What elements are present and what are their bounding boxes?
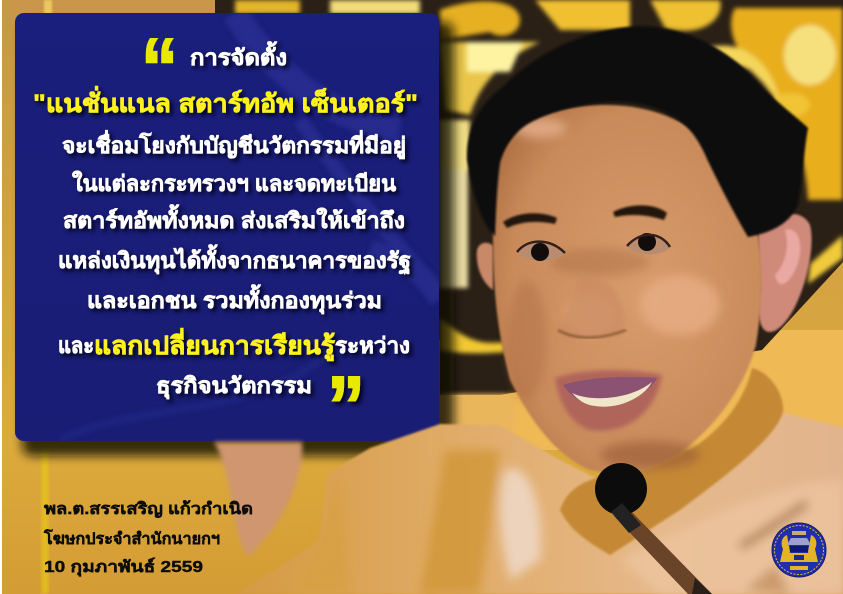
quote text: ระหว่าง [335,333,410,358]
panel: quote card [15,13,439,453]
arm and hand [214,442,302,556]
logo: government seal [772,523,826,577]
opening quotation mark: “ [141,21,178,115]
shirt [236,400,843,594]
face [493,105,762,473]
mouth [555,370,662,431]
quote text: และเอกชน รวมทั้งกองทุนร่วม [87,284,382,315]
face highlights and shadows [507,118,720,469]
quote text: จะเชื่อมโยงกับบัญชีนวัตกรรมที่มีอยู่ [62,129,406,160]
quote text: แหล่งเงินทุนได้ทั้งจากธนาคารของรัฐ [58,244,411,275]
ears [477,214,812,332]
shadow of the quote panel [22,22,454,456]
quote text: "แนชั่นแนล สตาร์ทอัพ เซ็นเตอร์" [33,86,418,118]
ornament: golden crest behind the speaker [235,0,843,430]
microphone [595,463,712,594]
nose [558,270,625,338]
hair [467,26,808,237]
quote text: การจัดตั้ง [190,41,287,70]
quote text: ธุรกิจนวัตกรรม [156,373,312,400]
credit: speaker name and date: โฆษกประจำสำนักนายกฯ [43,528,220,548]
collar [560,368,783,555]
quote text: แลกเปลี่ยนการเรียนรู้ [94,328,336,362]
credit: speaker name and date: 10 กุมภาพันธ์ 2559 [44,557,203,577]
quote text: และ [58,333,94,358]
eyes and eyebrows [503,205,670,261]
credit: speaker name and date [43,500,253,577]
quote text [33,41,418,400]
quote text: สตาร์ทอัพทั้งหมด ส่งเสริมให้เข้าถึง [63,204,405,233]
credit: speaker name and date: พล.ต.สรรเสริญ แก้วกำเนิด [44,500,253,519]
closing quotation mark: ” [327,359,365,453]
quote text: ในแต่ละกระทรวงฯ และจดทะเบียน [72,170,396,196]
